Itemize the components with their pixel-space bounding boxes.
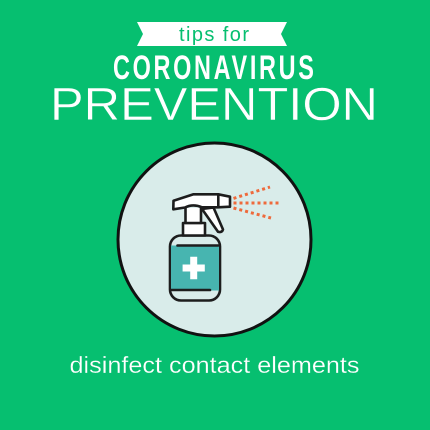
title: prevention: PREVENTION xyxy=(50,78,378,130)
bottle neck xyxy=(183,223,205,236)
spray head xyxy=(173,194,230,209)
ribbon banner xyxy=(137,22,287,46)
header xyxy=(50,22,378,130)
trigger xyxy=(202,208,223,232)
caption: disinfect contact elements xyxy=(70,352,360,378)
medical cross xyxy=(183,257,205,279)
icon: spray bottle xyxy=(170,194,230,300)
title: coronavirus: CORONAVIRUS xyxy=(113,49,314,87)
upper neck xyxy=(186,208,201,223)
bottle body xyxy=(170,236,220,300)
illustration circle xyxy=(118,143,311,336)
bottle label xyxy=(171,246,219,290)
label lines xyxy=(171,246,218,290)
spray droplets xyxy=(234,187,278,218)
tips for label: tips for xyxy=(179,24,249,46)
nozzle divider xyxy=(217,194,220,207)
